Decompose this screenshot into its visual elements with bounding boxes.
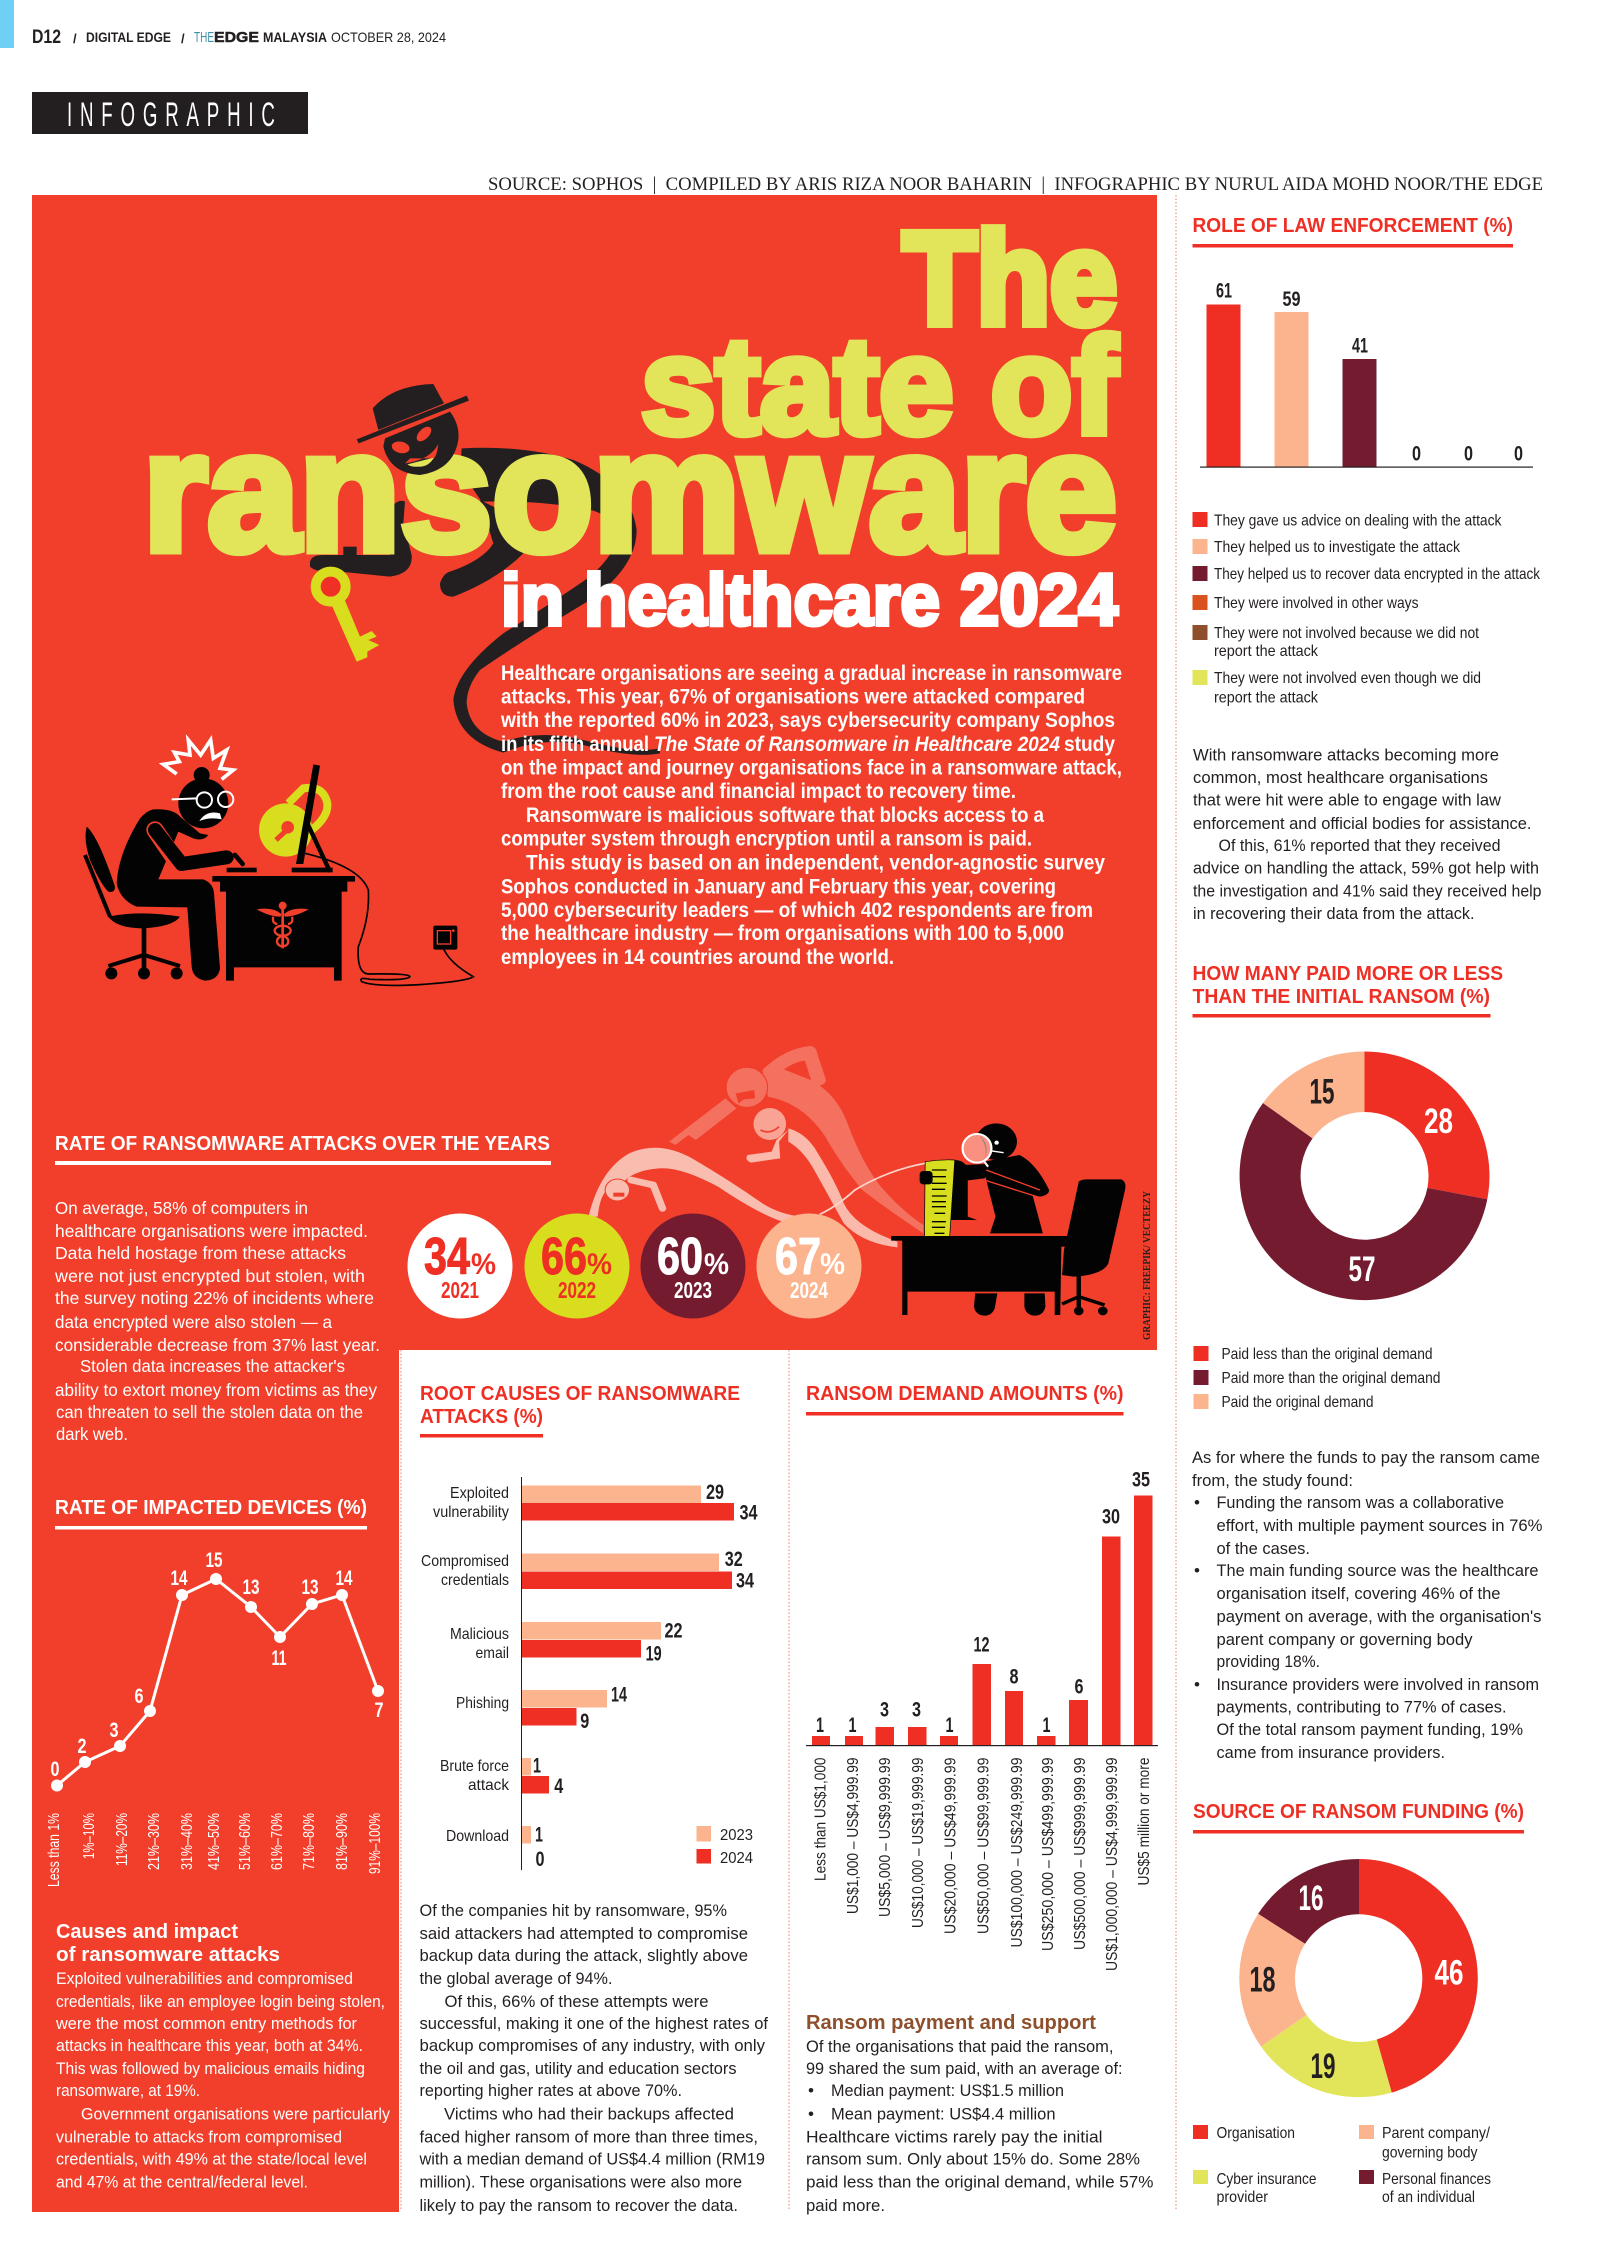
line chart: impacted devices: 3 — [110, 1719, 118, 1742]
line chart: impacted devices: 41%–50% — [206, 1813, 223, 1870]
text: causes and impact: vulnerable to attacks from compromised — [56, 2128, 342, 2146]
text: law enforcement body: common, most healthcare organisations — [1193, 768, 1488, 787]
illustration: worried worker at desk — [85, 740, 473, 985]
text: causes and impact: ransomware, at 19%. — [56, 2081, 200, 2100]
legend: law enforcement: They helped us to investigate the attack — [1214, 539, 1461, 556]
source line: SOURCE: SOPHOS | COMPILED BY ARIS RIZA NOOR BAHARIN | INFOGRAPHIC BY NURUL AIDA MOHD NOOR/THE EDGE — [488, 174, 1543, 195]
bar chart: root causes: email — [476, 1645, 509, 1662]
text: ransom payment and support: Healthcare victims rarely pay the initial — [806, 2128, 1102, 2146]
bar chart: root causes — [421, 1477, 758, 1871]
line chart: impacted devices: 81%–90% — [334, 1813, 351, 1870]
text: funding sources: from, the study found: — [1192, 1471, 1353, 1490]
heading: root causes — [420, 1383, 740, 1438]
bar chart: root causes: Compromised — [421, 1553, 509, 1570]
intro text: from the root cause and financial impact to recovery time. — [501, 780, 1016, 803]
text: backup compromise: the oil and gas, utility and education sectors — [420, 2059, 736, 2078]
text: causes and impact: credentials, like an employee login being stolen, — [56, 1992, 385, 2011]
text: attack rate body: Stolen data increases the attacker's — [80, 1356, 345, 1376]
line chart: impacted devices: 15 — [206, 1549, 223, 1572]
text: attack rate body: the survey noting 22% of incidents where — [55, 1288, 374, 1308]
text: ransom payment and support: Mean payment: US$4.4 million — [831, 2104, 1056, 2124]
text: ransom payment and support: 99 shared the sum paid, with an average of: — [806, 2059, 1122, 2078]
bar chart: ransom demand: US$20,000 – US$49,999.99 — [942, 1757, 960, 1934]
attack rate circles: % — [471, 1248, 496, 1281]
legend: law enforcement — [1192, 512, 1541, 706]
line chart: impacted devices: 13 — [302, 1576, 318, 1599]
intro text: with the reported 60% in 2023, says cybersecurity company Sophos — [500, 709, 1115, 732]
intro text: computer system through encryption until a ransom is paid. — [501, 828, 1032, 850]
legend: source of funding: Parent company/ — [1382, 2125, 1490, 2142]
bar chart: root causes: attack — [468, 1777, 510, 1794]
bar chart: ransom demand: US$500,000 – US$999,999.99 — [1072, 1757, 1089, 1950]
donut chart: source of funding: 16 — [1298, 1879, 1324, 1918]
bar chart: root causes: vulnerability — [433, 1504, 509, 1521]
bar chart: ransom demand: Less than US$1,000 — [812, 1757, 830, 1881]
title: in healthcare 2024 — [501, 560, 1118, 641]
intro text: attacks. This year, 67% of organisations were attacked compared — [501, 686, 1085, 708]
attack rate circles: 67 — [775, 1228, 821, 1286]
bar chart: ransom demand: 1 — [848, 1714, 857, 1737]
donut chart: paid more or less: 57 — [1348, 1250, 1376, 1289]
heading: rate of attacks — [55, 1133, 551, 1165]
image credit: GRAPHIC: FREEPIK/ VECTEEZY — [1142, 1190, 1153, 1340]
column dividers — [401, 195, 1176, 2210]
text: backup compromise: million). These organisations were also more — [420, 2172, 742, 2192]
heading: root causes: ATTACKS (%) — [420, 1406, 543, 1428]
bar chart: root causes: 29 — [706, 1481, 724, 1504]
text: causes and impact: attacks in healthcare this year, both at 34%. — [56, 2036, 363, 2055]
legend: source of funding: provider — [1216, 2189, 1269, 2206]
legend: law enforcement: They were not involved even though we did — [1214, 670, 1481, 687]
bar chart: ransom demand: US$1,000 – US$4,999.99 — [845, 1757, 862, 1914]
bar chart: root causes: Exploited — [450, 1485, 509, 1502]
text: backup compromise: the global average of 94%. — [420, 1969, 612, 1988]
donut chart: source of funding: 46 — [1434, 1954, 1464, 1992]
heading: source of ransom funding: SOURCE OF RANSOM FUNDING (%) — [1193, 1801, 1524, 1823]
text: funding sources: organisation itself, covering 46% of the — [1216, 1584, 1500, 1603]
text: funding sources: • — [1194, 1493, 1200, 1512]
heading: ransom demand amounts — [806, 1383, 1124, 1416]
icon: power cable and plug — [305, 853, 473, 985]
chart legend — [696, 1826, 753, 1867]
bar chart: root causes: 14 — [611, 1684, 627, 1706]
bar chart: law enforcement: 0 — [1514, 442, 1523, 466]
bar chart: ransom demand: US$5,000 – US$9,999.99 — [877, 1757, 894, 1917]
heading: rate of impacted devices: RATE OF IMPACTED DEVICES (%) — [55, 1497, 367, 1519]
text: causes and impact: were the most common entry methods for — [55, 2014, 357, 2033]
page header: / — [73, 31, 77, 46]
text: ransom payment and support: Of the organisations that paid the ransom, — [806, 2037, 1114, 2056]
bar chart: law enforcement: 59 — [1282, 288, 1300, 311]
heading: paid more or less: HOW MANY PAID MORE OR LESS — [1192, 963, 1503, 985]
text: backup compromise: with a median demand of US$4.4 million (RM19 — [419, 2150, 765, 2168]
text: backup compromise: Victims who had their backups affected — [444, 2104, 734, 2124]
text: funding sources: payments, contributing to 77% of cases. — [1216, 1698, 1506, 1716]
text: funding sources: providing 18%. — [1216, 1652, 1320, 1671]
line chart: impacted devices: 14 — [336, 1567, 353, 1590]
text: funding sources: effort, with multiple payment sources in 76% — [1216, 1516, 1542, 1535]
text: funding sources: Funding the ransom was a collaborative — [1216, 1493, 1504, 1512]
bar chart: root causes: Phishing — [456, 1695, 509, 1712]
bar chart: root causes: 1 — [535, 1824, 543, 1846]
intro text: Ransomware is malicious software that blocks access to a — [526, 804, 1044, 827]
bar chart: ransom demand: 1 — [1042, 1714, 1051, 1737]
line chart: impacted devices: 51%–60% — [237, 1813, 254, 1870]
section tag: infographic: INFOGRAPHIC — [67, 95, 275, 133]
attack rate circles: 2021 — [441, 1277, 479, 1303]
icon: key — [316, 572, 379, 662]
bar chart: ransom demand: US$1,000,000 – US$4,999,999.99 — [1104, 1757, 1121, 1971]
attack rate circles: 66 — [541, 1228, 587, 1286]
intro text: Sophos conducted in January and February this year, covering — [501, 876, 1056, 898]
text: attack rate body — [54, 1198, 380, 1444]
bar chart: law enforcement — [1200, 280, 1533, 468]
donut chart: paid more or less: 15 — [1310, 1072, 1334, 1112]
attack rate circles: 2023 — [674, 1277, 712, 1303]
text: attack rate body: ability to extort money from victims as they — [55, 1380, 377, 1400]
bar chart: ransom demand: 3 — [912, 1698, 921, 1722]
text: attack rate body: were not just encrypted but stolen, with — [54, 1266, 365, 1286]
bar chart: ransom demand: US$5 million or more — [1136, 1757, 1153, 1886]
heading: source of ransom funding — [1193, 1801, 1524, 1834]
line chart: impacted devices: 21%–30% — [146, 1813, 163, 1870]
text: backup compromise — [419, 1901, 768, 2215]
bar chart: law enforcement: 41 — [1352, 334, 1368, 358]
bar chart: ransom demand: 1 — [816, 1714, 824, 1737]
bar chart: root causes: Malicious — [450, 1626, 509, 1643]
title: ransomware — [143, 397, 1117, 587]
attack rate circles: 34 — [424, 1228, 470, 1286]
page header: THE — [194, 29, 214, 46]
text: attack rate body: considerable decrease from 37% last year. — [55, 1335, 380, 1355]
bar chart: root causes: 34 — [740, 1502, 758, 1524]
line chart: impacted devices: 13 — [242, 1576, 260, 1599]
illustration: analyst at desk with magnifier — [891, 1123, 1125, 1316]
page header: OCTOBER 28, 2024 — [331, 29, 446, 45]
heading: paid more or less — [1192, 963, 1503, 1018]
text: causes and impact — [55, 1921, 390, 2192]
intro text — [500, 662, 1122, 969]
icon: caduceus — [257, 902, 309, 948]
text: backup compromise: reporting higher rates at above 70%. — [420, 2081, 682, 2100]
text: funding sources: Insurance providers were involved in ransom — [1216, 1675, 1539, 1694]
text: funding sources: • — [1194, 1675, 1200, 1694]
legend: source of funding: governing body — [1382, 2144, 1478, 2162]
bar chart: root causes: 0 — [536, 1848, 544, 1871]
intro text: in its fifth annual — [501, 733, 649, 756]
text: law enforcement body: enforcement and official bodies for assistance. — [1193, 814, 1532, 833]
bar chart: root causes: 4 — [554, 1775, 563, 1798]
text: backup compromise: said attackers had attempted to compromise — [420, 1924, 748, 1943]
bar chart: law enforcement: 61 — [1216, 280, 1232, 302]
line chart: impacted devices: 11%–20% — [114, 1813, 131, 1866]
attack rate circles: 60 — [657, 1228, 703, 1286]
text: law enforcement body: With ransomware attacks becoming more — [1193, 746, 1499, 764]
bar chart: root causes: 19 — [646, 1642, 662, 1666]
bar chart: ransom demand: US$10,000 – US$19,999.99 — [910, 1757, 927, 1928]
legend: source of funding: Cyber insurance — [1216, 2171, 1317, 2188]
line chart: impacted devices — [46, 1549, 384, 1887]
text: attack rate body: On average, 58% of computers in — [55, 1198, 308, 1218]
text: funding sources: of the cases. — [1216, 1539, 1310, 1558]
line chart: impacted devices: 91%–100% — [367, 1813, 384, 1874]
legend: paid more or less: Paid the original demand — [1222, 1394, 1374, 1411]
intro text: The State of Ransomware in Healthcare 2024 — [654, 733, 1060, 756]
attack rate circles: 2022 — [558, 1277, 596, 1303]
legend: paid more or less: Paid more than the original demand — [1222, 1370, 1440, 1387]
text: ransom payment and support: paid more. — [806, 2196, 885, 2215]
heading: rate of attacks: RATE OF RANSOMWARE ATTACKS OVER THE YEARS — [55, 1133, 550, 1155]
page header: DIGITAL EDGE — [86, 29, 171, 45]
text: attack rate body: dark web. — [56, 1424, 128, 1444]
attack rate circles: % — [587, 1248, 612, 1281]
bar chart: law enforcement: 0 — [1412, 442, 1421, 466]
text: funding sources: came from insurance providers. — [1216, 1743, 1445, 1762]
legend: source of funding: Personal finances — [1382, 2171, 1491, 2188]
text: backup compromise: backup compromises of any industry, with only — [420, 2036, 765, 2055]
legend: law enforcement: They were not involved because we did not — [1214, 625, 1479, 642]
page header: MALAYSIA — [263, 29, 327, 45]
bar chart: ransom demand: 6 — [1074, 1676, 1084, 1698]
legend: law enforcement: report the attack — [1214, 643, 1319, 660]
heading: root causes: ROOT CAUSES OF RANSOMWARE — [420, 1383, 740, 1405]
heading: role of law enforcement — [1192, 215, 1513, 248]
text: backup compromise: Of this, 66% of these attempts were — [444, 1992, 708, 2011]
text: ransom payment and support — [806, 2012, 1154, 2215]
text: backup compromise: faced higher ransom of more than three times, — [420, 2128, 758, 2146]
legend: source of funding — [1193, 2125, 1491, 2206]
text: funding sources: Of the total ransom payment funding, 19% — [1216, 1720, 1523, 1739]
attack rate circles: 2024 — [790, 1277, 828, 1303]
text: ransom payment and support: • — [808, 2104, 814, 2124]
attack rate circles — [408, 1214, 862, 1318]
text: ransom payment and support: Median payment: US$1.5 million — [831, 2081, 1064, 2100]
text: funding sources: • — [1194, 1561, 1200, 1580]
bar chart: root causes: 32 — [725, 1548, 743, 1571]
chart legend: 2023 — [720, 1827, 753, 1844]
donut chart: source of funding: 18 — [1250, 1960, 1276, 2000]
line chart: impacted devices: 71%–80% — [301, 1813, 318, 1870]
intro text: on the impact and journey organisations face in a ransomware attack, — [501, 756, 1122, 780]
line chart: impacted devices: 31%–40% — [179, 1813, 196, 1870]
illustration: ghost figures — [588, 1046, 925, 1247]
heading: paid more or less: THAN THE INITIAL RANSOM (%) — [1192, 986, 1490, 1008]
legend: law enforcement: report the attack — [1214, 690, 1319, 706]
text: backup compromise: likely to pay the ransom to recover the data. — [420, 2196, 738, 2215]
text: attack rate body: data encrypted were also stolen — a — [55, 1312, 332, 1332]
line chart: impacted devices: 61%–70% — [269, 1813, 286, 1870]
attack rate circles: % — [704, 1248, 729, 1281]
legend: paid more or less: Paid less than the original demand — [1222, 1346, 1432, 1363]
text: ransom payment and support: paid less than the original demand, while 57% — [806, 2172, 1154, 2192]
text: causes and impact: This was followed by malicious emails hiding — [56, 2059, 365, 2078]
page header — [0, 0, 446, 48]
text: ransom payment and support: ransom sum. Only about 15% do. Some 28% — [806, 2150, 1140, 2168]
icon: thief head and hat — [357, 384, 469, 475]
legend: law enforcement: They gave us advice on dealing with the attack — [1214, 512, 1502, 530]
bar chart: ransom demand: US$50,000 – US$99,999.99 — [976, 1757, 992, 1934]
text: attack rate body: Data held hostage from these attacks — [55, 1243, 346, 1263]
text: backup compromise: successful, making it one of the highest rates of — [420, 2014, 768, 2033]
text: backup compromise: backup data during the attack, slightly above — [420, 1946, 748, 1965]
bar chart: root causes: 1 — [533, 1754, 541, 1778]
line chart: impacted devices: 0 — [50, 1758, 60, 1781]
page header: EDGE — [214, 29, 259, 46]
text: law enforcement body — [1193, 746, 1542, 923]
legend: source of funding: of an individual — [1382, 2189, 1475, 2206]
heading: ransom demand amounts: RANSOM DEMAND AMOUNTS (%) — [806, 1383, 1124, 1405]
page header: D12 — [32, 27, 61, 48]
text: causes and impact: Government organisations were particularly — [81, 2104, 390, 2124]
intro text: 5,000 cybersecurity leaders — of which 402 respondents are from — [501, 899, 1093, 922]
text: causes and impact: of ransomware attacks — [56, 1944, 280, 1966]
title: The — [903, 204, 1117, 352]
legend: law enforcement: They were involved in other ways — [1214, 595, 1418, 612]
icon: padlock on monitor — [259, 764, 330, 872]
donut chart: source of funding — [1239, 1859, 1478, 2097]
bar chart: ransom demand: 1 — [946, 1714, 954, 1737]
bar chart: root causes: Brute force — [440, 1758, 509, 1775]
text: law enforcement body: Of this, 61% reported that they received — [1218, 836, 1500, 855]
chart legend: 2024 — [720, 1850, 753, 1867]
line chart: impacted devices: 14 — [170, 1567, 188, 1590]
intro text: study — [1064, 733, 1115, 756]
text: law enforcement body: the investigation and 41% said they received help — [1193, 882, 1542, 900]
legend: paid more or less — [1194, 1346, 1440, 1411]
line chart: impacted devices: 1%–10% — [81, 1813, 98, 1859]
intro text: employees in 14 countries around the world. — [501, 946, 894, 969]
intro text: the healthcare industry — from organisations with 100 to 5,000 — [501, 922, 1064, 945]
text: funding sources: payment on average, with the organisation's — [1216, 1607, 1542, 1626]
text: funding sources: As for where the funds to pay the ransom came — [1192, 1448, 1540, 1467]
section tag: infographic — [32, 92, 308, 134]
heading: role of law enforcement: ROLE OF LAW ENFORCEMENT (%) — [1192, 215, 1513, 237]
line chart: impacted devices: Less than 1% — [46, 1813, 63, 1887]
intro text: This study is based on an independent, vendor-agnostic survey — [526, 852, 1105, 874]
bar chart: ransom demand: 8 — [1010, 1666, 1019, 1688]
red hero panel — [32, 195, 1157, 2212]
donut chart: source of funding: 19 — [1310, 2047, 1336, 2086]
legend: law enforcement: They helped us to recover data encrypted in the attack — [1214, 566, 1541, 583]
bar chart: ransom demand: 35 — [1132, 1468, 1150, 1492]
intro text: Healthcare organisations are seeing a gradual increase in ransomware — [501, 662, 1122, 685]
title: state of — [641, 310, 1117, 463]
text: funding sources: parent company or governing body — [1216, 1630, 1473, 1649]
bar chart: root causes: 9 — [580, 1710, 589, 1733]
bar chart: root causes: 22 — [664, 1620, 682, 1642]
page header: / — [181, 31, 185, 46]
bar chart: root causes: Download — [446, 1828, 509, 1845]
text: law enforcement body: that were hit were able to engage with law — [1193, 790, 1502, 810]
donut chart: paid more or less: 28 — [1424, 1102, 1453, 1141]
donut chart: paid more or less — [1240, 1051, 1489, 1300]
bar chart: ransom demand: US$250,000 – US$499,999.99 — [1040, 1757, 1057, 1951]
bar chart: root causes: credentials — [441, 1572, 509, 1589]
legend: source of funding: Organisation — [1216, 2125, 1295, 2142]
text: causes and impact: Exploited vulnerabilities and compromised — [56, 1969, 353, 1988]
text: law enforcement body: advice on handling the attack, 59% got help with — [1193, 858, 1539, 878]
line chart: impacted devices: 2 — [78, 1735, 86, 1758]
line chart: impacted devices: 6 — [134, 1685, 144, 1708]
bar chart: ransom demand — [806, 1468, 1158, 1971]
text: backup compromise: Of the companies hit by ransomware, 95% — [420, 1901, 727, 1920]
bar chart: root causes: 34 — [736, 1570, 754, 1592]
title — [143, 204, 1118, 641]
text: causes and impact: and 47% at the central/federal level. — [56, 2172, 308, 2192]
text: causes and impact: Causes and impact — [56, 1921, 238, 1943]
attack rate circles: % — [820, 1248, 845, 1281]
text: attack rate body: healthcare organisations were impacted. — [55, 1221, 368, 1241]
text: attack rate body: can threaten to sell the stolen data on the — [56, 1402, 363, 1422]
text: funding sources — [1192, 1448, 1542, 1762]
bar chart: ransom demand: US$100,000 – US$249,999.99 — [1009, 1757, 1026, 1948]
bar chart: ransom demand: 12 — [974, 1634, 990, 1656]
text: ransom payment and support: Ransom payment and support — [806, 2012, 1096, 2034]
heading: rate of impacted devices — [55, 1497, 367, 1530]
bar chart: ransom demand: 3 — [880, 1698, 889, 1722]
text: funding sources: The main funding source was the healthcare — [1216, 1561, 1538, 1580]
text: causes and impact: credentials, with 49% at the state/local level — [56, 2150, 367, 2168]
text: ransom payment and support: • — [808, 2081, 814, 2100]
line chart: impacted devices: 7 — [374, 1699, 384, 1722]
illustration: thief body and tail — [310, 448, 660, 755]
bar chart: ransom demand: 30 — [1102, 1506, 1120, 1528]
line chart: impacted devices: 11 — [272, 1647, 287, 1670]
text: law enforcement body: in recovering their data from the attack. — [1193, 904, 1474, 923]
bar chart: law enforcement: 0 — [1464, 442, 1473, 466]
